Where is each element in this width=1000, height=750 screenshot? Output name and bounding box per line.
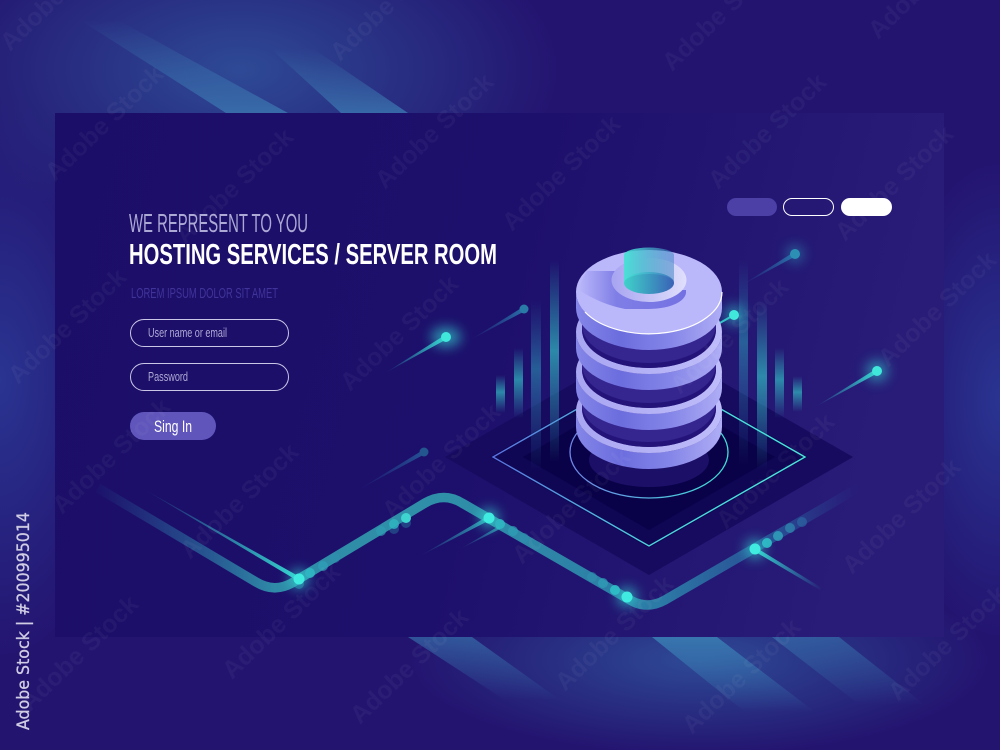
platform outline diamond — [493, 368, 805, 546]
watermarks: Adobe Stock — [377, 398, 506, 524]
watermarks: Adobe Stock — [837, 453, 966, 579]
teal core — [624, 272, 674, 294]
button: sign in — [130, 412, 216, 440]
path nodes and dots — [140, 487, 822, 607]
disk 1 top — [576, 248, 722, 350]
watermarks: Adobe Stock — [170, 123, 299, 249]
watermarks: Adobe Stock — [370, 68, 499, 194]
input: user name — [130, 320, 288, 346]
stock id label: Adobe Stock | #200995014 — [14, 512, 34, 730]
watermarks: Adobe Stock — [873, 246, 1000, 372]
panel: main card — [55, 113, 944, 637]
node: dim upper left — [470, 304, 528, 340]
watermarks: Adobe Stock — [677, 613, 806, 739]
watermarks: Adobe Stock — [665, 273, 794, 399]
node: bright right — [815, 360, 888, 407]
watermarks: Adobe Stock — [3, 263, 132, 389]
dots before peak — [376, 513, 411, 536]
junction: lower — [587, 572, 637, 607]
platform: isometric dark base — [445, 340, 853, 575]
disk 3 — [576, 330, 722, 430]
vertical glow bars: left — [496, 260, 559, 472]
pagination pills — [727, 198, 892, 216]
light streaks: bottom — [408, 637, 925, 712]
input: user name: User name or email — [148, 325, 227, 340]
watermarks: Adobe Stock — [15, 590, 144, 716]
node: bright left — [385, 327, 461, 373]
junction: centre — [420, 508, 529, 556]
node: behind server — [718, 305, 744, 325]
button: sign in: Sing In — [154, 417, 192, 436]
watermarks: Adobe Stock — [830, 120, 959, 246]
watermarks: Adobe Stock — [175, 438, 304, 564]
eyebrow text: WE REPRESENT TO YOU — [129, 208, 308, 238]
junction: right — [745, 517, 822, 590]
server shadow — [589, 433, 709, 487]
disk 4 bottom — [576, 369, 722, 469]
input: password — [130, 364, 288, 390]
disk 2 — [576, 290, 722, 390]
watermarks: Adobe Stock — [711, 408, 840, 534]
watermarks: Adobe Stock — [217, 558, 346, 684]
main heading: HOSTING SERVICES / SERVER ROOM — [129, 239, 497, 271]
watermarks: Adobe Stock — [335, 270, 464, 396]
light streaks: top left — [80, 20, 408, 113]
subheading: LOREM IPSUM DOLOR SIT AMET — [131, 285, 278, 302]
input: password: Password — [148, 369, 188, 384]
watermarks: Adobe Stock — [47, 393, 176, 519]
watermarks: Adobe Stock — [507, 443, 636, 569]
junction: left — [140, 487, 340, 589]
watermarks: Adobe Stock — [40, 60, 169, 186]
server database stack — [576, 248, 722, 469]
ring around core — [612, 258, 686, 302]
node: dim lower left — [358, 448, 428, 490]
node: dim upper right — [742, 245, 804, 285]
watermarks: Adobe Stock — [497, 110, 626, 236]
watermarks: Adobe Stock — [345, 603, 474, 729]
platform outline circle — [570, 406, 728, 498]
watermarks: Adobe Stock — [550, 570, 679, 696]
groove on top surface — [579, 271, 686, 309]
watermarks: Adobe Stock — [703, 68, 832, 194]
network path line — [98, 487, 860, 605]
vertical glow bars: right — [739, 260, 802, 470]
signal nodes — [358, 245, 888, 490]
